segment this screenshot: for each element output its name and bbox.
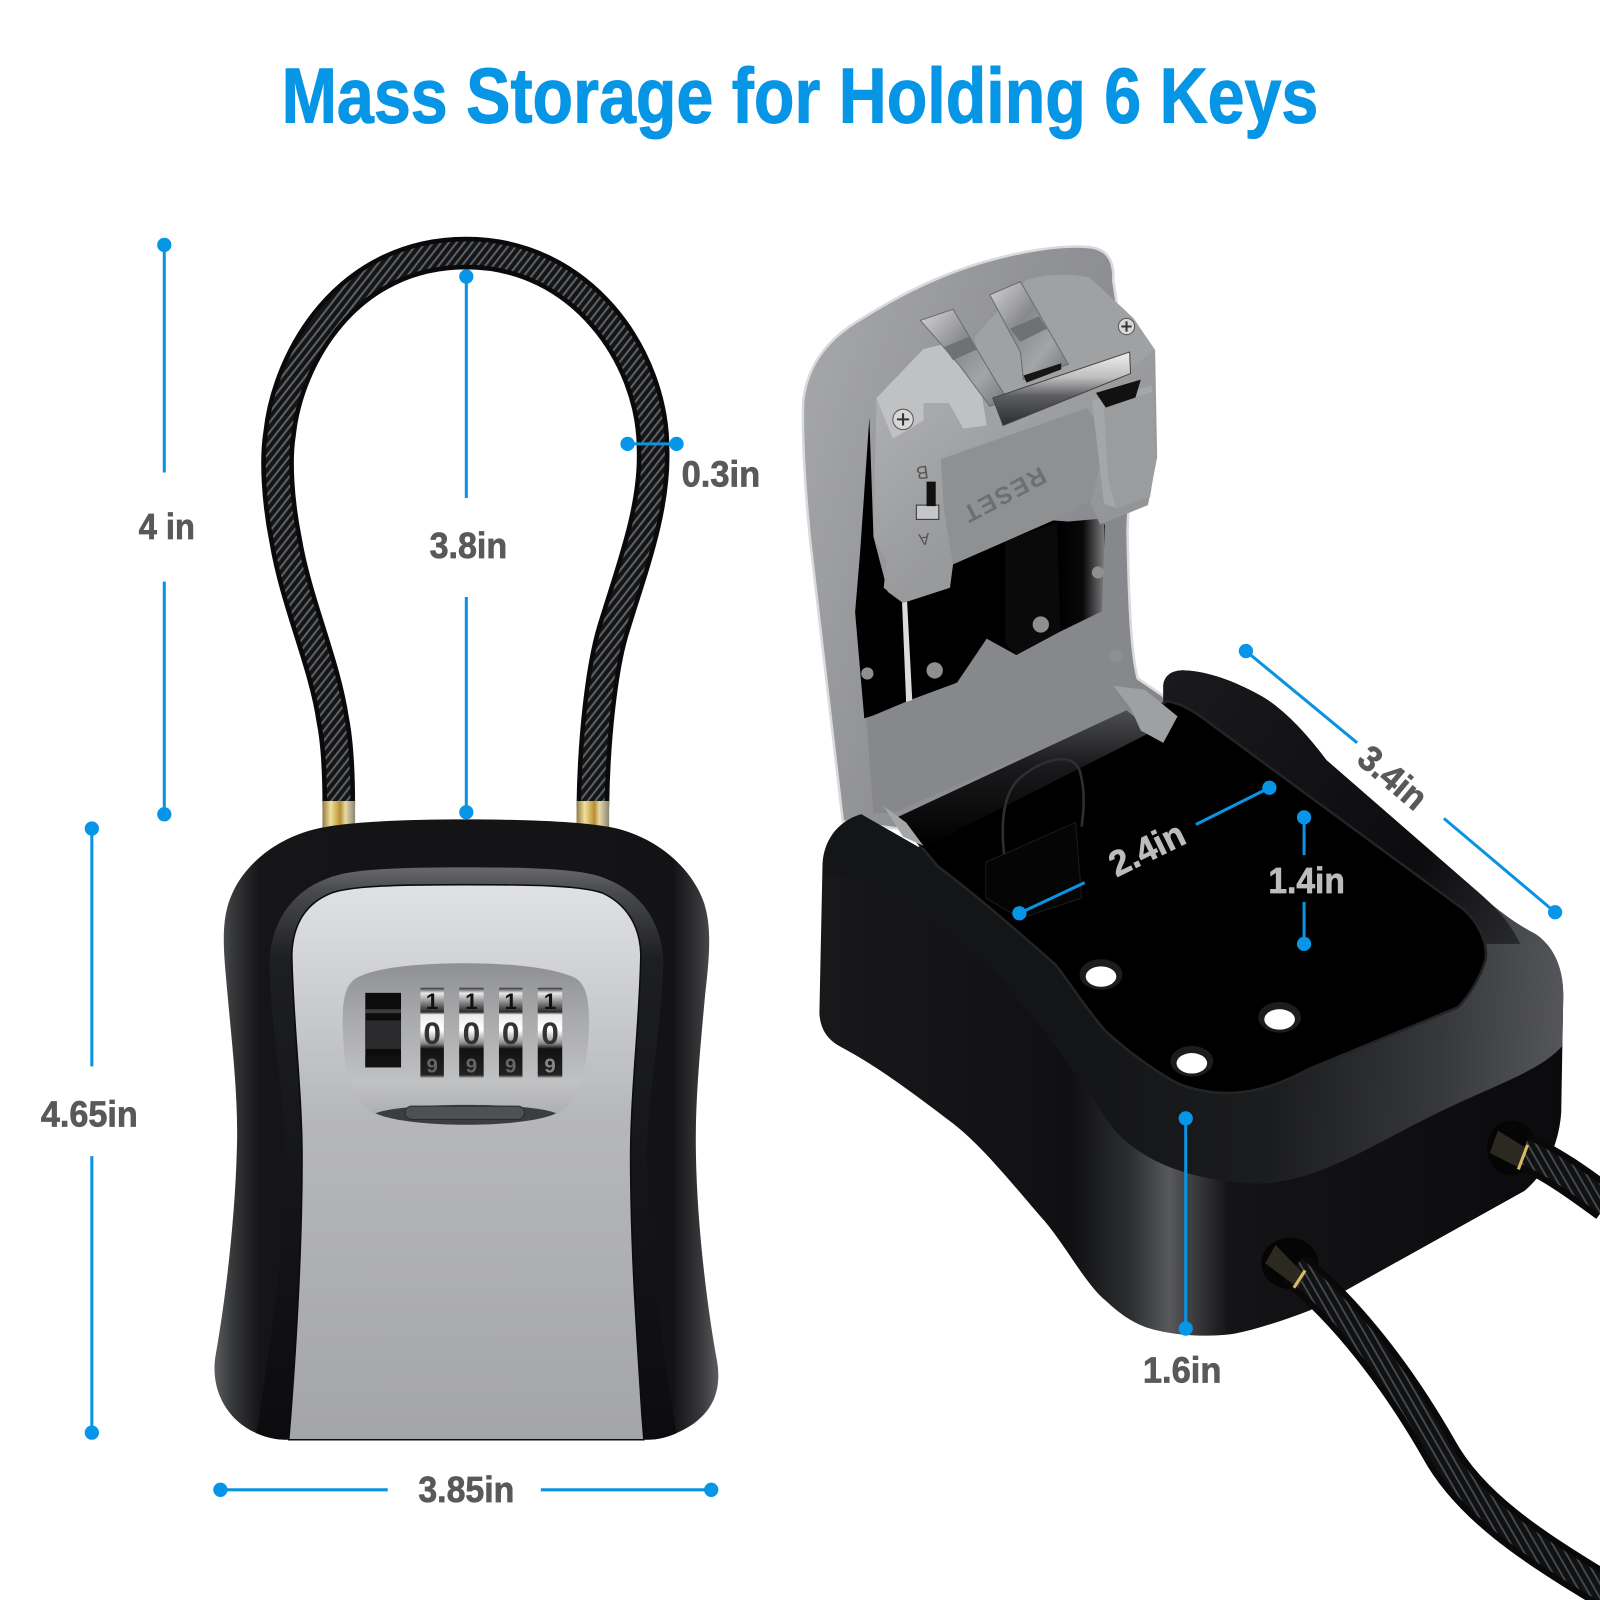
mechanism block: [873, 350, 1157, 603]
dimension: 3.4in: [1239, 644, 1562, 919]
key hook: [986, 759, 1084, 918]
dimension: 3.85in: 3.85in: [418, 1470, 514, 1510]
lid floor: [866, 515, 1130, 813]
dimension: 3.85in: [213, 1470, 718, 1510]
lock body: [214, 819, 718, 1440]
cable shackle: [278, 253, 653, 806]
dimension: 1.6in: 1.6in: [1143, 1351, 1221, 1391]
inner ring: [255, 867, 678, 1440]
dimension: 1.4in: [1268, 810, 1345, 951]
cable near: [1294, 1151, 1600, 1592]
cable exits: [1261, 1120, 1536, 1289]
combination wheels: 9: [505, 1055, 516, 1077]
rim: [822, 670, 1563, 1184]
combination wheels: 0: [463, 1015, 480, 1051]
silver strip: [902, 602, 912, 702]
combination wheels: 9: [426, 1055, 438, 1077]
dimension: 1.6in: [1143, 1111, 1221, 1391]
spring clip left: [920, 309, 1008, 406]
combination wheels: 1: [544, 989, 556, 1014]
right lip: [1163, 670, 1520, 944]
switch: [916, 482, 939, 519]
black rear cavity: [855, 417, 1105, 718]
dimension: 2.4in: [1012, 781, 1277, 920]
combination wheels: 1: [465, 989, 478, 1014]
hinge shaft: [884, 686, 1178, 848]
spring clip right: [990, 282, 1068, 383]
brass collars: [1265, 1131, 1528, 1288]
front view lock: [214, 253, 718, 1440]
combination wheels: [420, 988, 562, 1078]
release button: [376, 1105, 556, 1125]
upper housing: [974, 275, 1155, 426]
combination wheels: 9: [544, 1055, 556, 1077]
dimension: 3.4in: 3.4in: [1350, 737, 1435, 818]
combination wheels: 1: [426, 989, 438, 1014]
A marker: A: [917, 529, 931, 548]
grey door panel: [289, 885, 644, 1440]
brass ferrules: [322, 801, 609, 830]
dimension: 3.8in: 3.8in: [430, 526, 507, 566]
combination wheels: 0: [502, 1015, 520, 1051]
reset slide: [941, 408, 1107, 564]
dimension: 4.65in: [41, 821, 138, 1440]
dimension: 1.4in: 1.4in: [1268, 861, 1345, 901]
base outer shell: [819, 670, 1563, 1336]
pegs: [861, 566, 1122, 680]
dimension: 0.3in: 0.3in: [682, 455, 760, 495]
combination wheels: 9: [466, 1055, 477, 1077]
B marker: B: [915, 462, 930, 484]
combination wheels: 0: [541, 1015, 559, 1051]
right catch box: [1092, 380, 1156, 508]
combination wheels: 1: [504, 989, 517, 1014]
combination wheels: 0: [423, 1015, 441, 1051]
dimension: 3.8in: [430, 269, 507, 819]
RESET label: RESET: [957, 461, 1050, 528]
open view lock: [803, 247, 1600, 1592]
open lid: [803, 247, 1178, 829]
cavity: [917, 701, 1486, 1093]
dimension: 4.65in: 4.65in: [41, 1095, 138, 1135]
inner plate: [1057, 518, 1104, 632]
keypad recess: [343, 963, 589, 1125]
mounting holes: [1080, 959, 1301, 1077]
dimension: 4 in: 4 in: [139, 507, 195, 547]
steel bar: [993, 352, 1131, 426]
slider: [365, 993, 401, 1067]
dimension: 0.3in: [620, 437, 760, 495]
dimension: 4 in: [139, 238, 195, 821]
screws: [893, 318, 1135, 430]
title: Mass Storage for Holding 6 Keys: [282, 53, 1318, 139]
dimension: 2.4in: 2.4in: [1103, 814, 1192, 885]
